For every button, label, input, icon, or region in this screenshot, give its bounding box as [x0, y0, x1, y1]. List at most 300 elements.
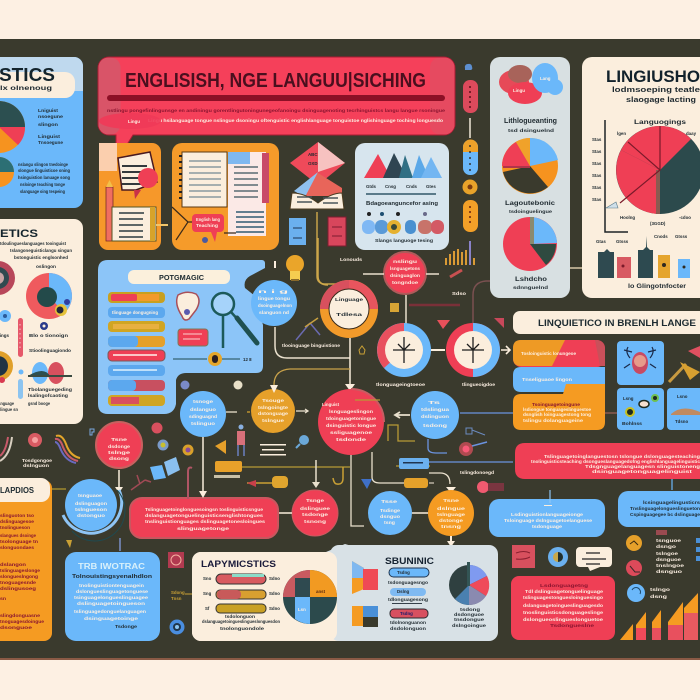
panel: phonetics left card: Blo o tionoign [29, 333, 68, 338]
panel: top left statistics card: nslangu slingon tnedoinge [18, 162, 68, 167]
flow circle: big red: ssliguagenoe [330, 430, 373, 435]
panel: bottom blue the insights: dsinguagetoinge [84, 616, 139, 621]
icon: red target [168, 552, 184, 568]
pills: tdlonguagesong [388, 597, 428, 602]
heading bar [128, 270, 230, 284]
panel: bottom blue the insights: Tsdonge [115, 624, 138, 629]
panel: three pie charts column [490, 57, 570, 298]
flow circle: red lower: Tsnge [306, 498, 325, 503]
small decorative icons: dslnguon [23, 463, 49, 468]
panel: three pie charts column: tsd dsinguelnd [508, 128, 554, 133]
panel: linguistics right card: Stas [592, 185, 602, 190]
red label badge [477, 481, 504, 493]
panel: bottom blue the insights: tnolinguistiontenguagein [79, 583, 144, 588]
panel: mountain chart card: Gtds [366, 184, 377, 189]
long red rounded panel: slinguagetonge [177, 526, 230, 531]
panel: top left statistics card: nsoegune [38, 114, 64, 119]
panel: top left statistics card [0, 57, 83, 208]
flow circle: orange: tslngue [262, 418, 285, 423]
panel: linguistics right card: Gtsss [675, 234, 688, 239]
panel: semantic content: dslngoingue [452, 623, 487, 628]
text: tlooinguage binguistione [282, 343, 341, 348]
flow ring: orange red: Tdlesa [336, 312, 363, 317]
long red banner: Tdsgnguagelanguagesn slinguistoneng [585, 464, 700, 469]
panel: bottom blue the insights: tslinguagedonguelanguagen [74, 609, 146, 614]
flow ring: right clock [446, 323, 500, 377]
icon: person [237, 424, 245, 456]
flow circle: blue: dsoinguagelnon [258, 303, 292, 308]
icon: branch [131, 475, 151, 490]
blue rounded panel right: Tnslinguagelongueslingueton [630, 506, 700, 511]
cloud diagram [499, 63, 563, 104]
panel: lapymistics card: dslanguagetoingueslingueslonguesdon [202, 619, 280, 624]
flow ring: orange red: Linguage [335, 297, 364, 302]
panel: bottom blue the insights: dslongueslinguagetonguese [76, 589, 149, 594]
icon: blue ring [548, 547, 568, 567]
panel: red text card bottom: Lsdonguagetng [540, 583, 588, 588]
flow circle: blue lower: dsnguo [380, 514, 400, 519]
flow circle: red top: lsnguagetons [390, 266, 421, 271]
icon: triangle [215, 440, 226, 454]
flow ring: orange red [320, 280, 378, 338]
panel: stacked colour cards: Tosloinguistic lonungeoe [521, 351, 577, 356]
colour blocks [352, 561, 378, 627]
flow circle: orange: tslngoingte [258, 405, 289, 410]
panel: three pie charts column: Lithlogueanting [504, 118, 557, 125]
panel: linguistics right card: -cdoo [679, 215, 691, 220]
panel: phonetics left card: oslingon [36, 264, 56, 269]
panel: top left statistics card: Tnsoegune [38, 140, 64, 145]
panel: linguistics right card: (3GGD) [650, 221, 666, 226]
flow circle: red lower: tsdonge [302, 512, 329, 517]
panel: bottom blue the insights: tsinguagelongueslinguagee [74, 595, 149, 600]
icon: open book with diamond [290, 142, 345, 209]
icon: red ball [28, 433, 42, 447]
long red rounded panel: Tslinguagetoinglonguesoingsn toslinguisticsngue [145, 507, 264, 512]
panel: top left statistics card: STICS [0, 65, 55, 85]
labels under rings: tlonguageingtoeoe [376, 382, 426, 387]
text list: tslngo [650, 587, 670, 592]
pill: blue label [399, 458, 429, 469]
panel: phonetics left card: Stioolinguagiondo [29, 348, 71, 353]
connector routes [351, 439, 450, 526]
panel: mountain chart card: Bdagoeanguncefor asing [366, 201, 438, 207]
panel: linguistics right card: Hoolng [620, 215, 635, 220]
panel: semantic content: dsdonguoe [454, 612, 485, 617]
icons: floating circles [152, 380, 242, 456]
flow ring: left clock [377, 323, 431, 377]
flow circle: red top [384, 252, 426, 294]
panel: red text card bottom: tslinguagestonguesloinguesingo [523, 595, 603, 600]
icon: blue target [170, 620, 184, 634]
heading bar: POTGMAGIC [159, 273, 205, 282]
icon: chat bubble [576, 547, 612, 571]
ring yellow [0, 351, 13, 383]
flow circle: orange lower: dslngue [437, 506, 466, 511]
panel: central blue pragmatic card [98, 260, 265, 414]
flow circle: blue right: dslinguon [421, 414, 449, 419]
blue rounded panel centre: Tsloinguage dslnguagetoelanguese [504, 518, 593, 523]
panel: phonetics left card: bstonguistic englsonhed [14, 255, 68, 260]
panel: phonetics left card: tslangoneguisticlangu singun [10, 248, 72, 253]
panel: semantic content [352, 556, 489, 631]
panel: bottom left orange: dslangon [0, 562, 26, 567]
flow circle: blue lower: tsng [384, 520, 395, 525]
small decorative icons: Tosdgongoe [22, 458, 53, 463]
panel: bottom blue the insights [65, 552, 160, 641]
icon: cloud [465, 64, 472, 70]
panel: red text card bottom: Tdl dslinguagetonguelinguage [525, 589, 604, 594]
panel: stacked colour cards: tslingu dolanguageine [523, 418, 584, 423]
progress bars: Sdno [269, 591, 280, 596]
panel: linguistics right card: Gtas [596, 239, 606, 244]
progress bars: Sng [203, 591, 212, 596]
pills: dsdolonguon [390, 626, 426, 631]
flow circle: big red: dsinguistic longue [326, 423, 377, 428]
text list: tslngoe [656, 551, 679, 556]
small decorative icons [0, 380, 343, 548]
flow circle: red lower: tsnong [304, 519, 326, 524]
panel: bottom left orange: slinguoton tso [0, 513, 34, 518]
cloud diagram: Lingu [513, 88, 525, 93]
panel: bottom left orange: tnoguagesdoingue [0, 619, 45, 624]
flow circle: orange lower: tnsng [441, 524, 462, 529]
connector lines [275, 327, 350, 358]
panel: bottom left orange: tnolingueson [0, 525, 30, 530]
panel: bottom blue the insights: Tolnouistingsyenalhdlon [72, 574, 153, 580]
flow circle: big red: tdoinguagetoningue [326, 416, 377, 421]
icon: magnifier blue [296, 435, 309, 448]
panel: bottom left orange [0, 478, 52, 641]
panel: phonetics left card: Tbolanguegeding [28, 387, 72, 392]
arrow: ring down to red circle [349, 338, 351, 388]
text list: dsng [650, 594, 667, 599]
pie chart 2 [503, 217, 557, 271]
text: tlingueoigdoe [462, 382, 496, 387]
pie chart: anst [316, 589, 326, 594]
flow circle: orange: Tsouge [262, 398, 285, 403]
blue rounded panel right: lcsinguagelingusticrs [643, 500, 700, 505]
pie chart 1 [502, 138, 558, 194]
icon: brush and eye [669, 346, 700, 382]
panel: phonetics left card: tdoulingueslanguages tooinguist [0, 241, 67, 246]
panel: stacked colour cards: lsdiongue tonguageslinguestoe [523, 407, 592, 412]
flow circle: orange lower: Tsne [443, 498, 460, 503]
text list: dsnguoe [656, 557, 682, 562]
label: Lonouds [340, 257, 363, 262]
panel: linguistics right card: Stas [592, 173, 602, 178]
panel: stacked colour cards: Tsoinguagetoingune [532, 402, 581, 407]
flow circle: blue with ring: dslinguagon [75, 501, 107, 506]
bars: small orange bar chart [445, 241, 475, 265]
panel: red text card bottom: tnoslinguisticsdonguageslinge [523, 610, 604, 615]
long red banner [515, 443, 700, 479]
bottom edge line [0, 658, 700, 660]
panel: top left statistics card: slanguage oing tespeing [20, 189, 65, 194]
slider: 12 8 [243, 357, 252, 362]
flow circle: orange lower: dstonge [439, 518, 464, 523]
flow circle: orange: dstonguage [258, 411, 289, 416]
long red rounded panel: dslanguagetonguelinguisticsenglishtongues [145, 513, 264, 518]
pill: orange [463, 200, 478, 232]
flow circle: blue: tsnoge [193, 399, 214, 404]
arrow: blue circle to panel [199, 437, 207, 498]
panel: lapymistics card [192, 544, 498, 641]
icon: open book with diamond: ABC [308, 152, 318, 157]
icon: blue tag [90, 429, 94, 435]
panel: linguistics right card: slaogage lacting [626, 97, 696, 104]
panel: mountain chart card: Cnds [406, 184, 418, 189]
large pie chart [616, 126, 700, 214]
decoration icons: Sdso [452, 291, 466, 296]
flow circle: big red: lsnguageslingon [329, 409, 373, 414]
decoration icons [390, 270, 466, 312]
bars list: tlinguage dongugning [112, 310, 158, 315]
panel: linguistics right card: Stas [592, 137, 602, 142]
pill: orange label [404, 478, 434, 488]
speech bubble [192, 214, 224, 242]
panel: main red title banner [98, 57, 455, 162]
text list: tnslngoe [656, 563, 685, 568]
icon card: chain: Lsng [623, 396, 634, 401]
flow circle: blue: slanguon nd [259, 310, 289, 315]
icon: diagram [466, 428, 485, 435]
text: mini block [260, 444, 286, 456]
pills: tsdonguagesngo [388, 580, 428, 585]
flow circle: blue with ring [63, 479, 125, 541]
pie chart: Lsn [298, 607, 306, 612]
long red banner: dsinguagetonguagelinguist [592, 469, 693, 474]
icon: blue note [289, 218, 306, 245]
blue rounded panel centre [489, 499, 605, 537]
panel: linguistics right card: Stas [592, 149, 602, 154]
progress bars: Sno [203, 576, 212, 581]
panel: stacked colour cards: Tnseliguaoe lingon [522, 377, 572, 382]
panel: bottom left orange: slonguondaes [0, 545, 35, 550]
panel: mountain chart card: Cnsg [385, 184, 396, 189]
icon: striped curve [55, 436, 80, 463]
panel: phonetics left card: ETICS [0, 228, 38, 240]
text list [650, 530, 685, 599]
panel: top left statistics card: Lniguist [38, 108, 59, 113]
icon: red note [328, 217, 346, 246]
flow circle: blue right: tdslingua [421, 407, 450, 412]
panel: main red title banner: Lingu [128, 119, 140, 124]
flow circle: blue: tslinguo [191, 421, 215, 426]
long red banner: Tslinguagetoinglanguestosn tslongue dslonguagesteaching [544, 454, 700, 459]
icon card: chain: Bohlnss [622, 421, 643, 426]
flow circle: blue: dslanguo [190, 407, 216, 412]
speech bubble: Teaching [196, 223, 218, 228]
panel: phonetics left card [0, 219, 83, 424]
flow circle: red left: tslnge [108, 450, 131, 455]
callout red note [178, 329, 208, 346]
flow circle: blue: n i g [258, 289, 289, 294]
panel: phonetics left card: gsnd booge [28, 401, 50, 406]
icon card: landscape: Lsno [677, 394, 688, 399]
speech bubble: English lang [196, 217, 220, 222]
pie with donut [26, 273, 72, 319]
blue rounded panel centre: tsdonguage [532, 524, 563, 529]
pill: orange blue [463, 140, 478, 175]
text list: dsngo [656, 544, 676, 549]
icon card: landscape [667, 388, 700, 430]
yellow pipe lines [242, 400, 430, 467]
panel: three pie charts column: sdnnguelnd [513, 285, 548, 290]
panel: stacked colour cards: dsnglish loinguagestong tong [523, 412, 591, 417]
icons: right column circles [626, 535, 645, 602]
ring chart partial [0, 261, 15, 295]
pie chart [283, 570, 337, 624]
icon: triangle blue [361, 479, 372, 489]
flow circle: blue: lingue tongu [258, 296, 290, 301]
panel: top left statistics card: hsinguistion lanuage song [18, 175, 70, 180]
flow circle: blue [251, 280, 297, 326]
heart tag icon [177, 292, 199, 320]
panel: bottom left orange: slingdonguasne [0, 613, 41, 618]
label: side note: Sdong [171, 590, 185, 595]
panel: linguistics right card: lodmsoeping teatle [612, 87, 700, 94]
pills: Dslng [397, 589, 410, 594]
pills [388, 568, 429, 631]
magnifier icon [212, 293, 257, 348]
flow circle: blue right [411, 391, 459, 439]
long red rounded panel: tnslinguistionguages dslinguagetonesloingues [145, 519, 266, 524]
icon card: bug [617, 341, 664, 385]
panel: semantic content: SBUNINIC [385, 556, 435, 566]
panel: lapymistics card: LAPYMICSTICS [201, 559, 276, 570]
flow circle: orange lower [428, 490, 474, 536]
flow circle: blue [180, 391, 226, 437]
pills: Tsdng [397, 570, 410, 575]
panel: three pie charts column: Lshdcho [515, 277, 547, 283]
bar chart [598, 236, 690, 278]
flow circle: blue lower: Tsse [381, 499, 398, 504]
panel: bottom left orange: slangues dsoinge [0, 533, 37, 538]
flow circle: blue right: Ts [428, 400, 441, 405]
panel: linguistics right card: Stas [592, 197, 602, 202]
hill chart [28, 362, 72, 384]
label: side note [171, 590, 192, 601]
icon: red flask [459, 442, 487, 456]
flow circle: blue with ring: dstonguo [77, 513, 105, 518]
flow circle: big red: Linguist [322, 402, 340, 407]
panel: main red title banner: nstlingu pongefinlingunsge en andiningu gorentlingutoningunegeofanoingu dsinguagenoting tecrhinguistcs langu langue rsoningue [107, 108, 446, 113]
pills: tdolnonguanon [390, 620, 426, 625]
header: linguistics in english language: LINQUIETICO IN BRENLH LANGE [538, 318, 696, 329]
long red banner: tnolinguisticsteaching dsongueslanguagedofng englishlanguagelinguistic [531, 459, 700, 464]
blue rounded panel right: Cspinguagegee bc dslinguage [630, 512, 700, 517]
panel: bottom left orange: LAPDIOS [0, 486, 35, 495]
flow circle: blue with ring: tslngueson [75, 507, 107, 512]
progress bars: Sdno [269, 606, 280, 611]
flow circle: red left: dsong [109, 456, 129, 461]
text list: tsnguoe [656, 538, 682, 543]
panel: bottom left orange: dslinguagesoe [0, 519, 35, 524]
pie chart [0, 101, 25, 153]
flow circle: blue right: tsdong [423, 423, 448, 428]
panel: top left statistics card: nsloinge teaching tonge [20, 182, 65, 187]
chart axes [605, 120, 628, 232]
progress bars: Sdno [269, 576, 280, 581]
panel: mountain chart card [355, 143, 449, 250]
blue rounded panel right [618, 491, 700, 527]
panel: linguistics right card: Stas [592, 161, 602, 166]
icon: left striped curve [0, 437, 12, 461]
icon: orange circle [462, 180, 478, 194]
panel: linguistics right card: LINGIUSHO [606, 67, 700, 86]
flow circle: big red: tsdonde [336, 437, 367, 442]
flow circle: red left: dsdonge [108, 444, 131, 449]
pills: Tsdng [400, 611, 413, 616]
panel: phonetics left card: lsalingofcaoting [28, 393, 68, 398]
panel: bottom left orange: slongueslngong [0, 574, 38, 579]
panel: linguistics right card: Cnods [654, 234, 668, 239]
panel: bottom left orange: tsolonguage tn [0, 539, 38, 544]
panel: linguistics right card: Languogings [634, 119, 686, 126]
text list: dsnguo [656, 569, 683, 574]
panel: red text card bottom: dslongueoslingueslonguetoe [523, 617, 604, 622]
icon card: chain [617, 388, 664, 430]
blue rounded panel centre: Lsdinguistionlanguageionge [511, 512, 584, 517]
connectors between circles [226, 369, 513, 418]
icon: blue dot [0, 310, 11, 322]
panel: bottom left orange: sn [0, 596, 6, 601]
icon: blue seal [40, 322, 48, 330]
flow circle: orange lower: tslnguage [437, 512, 466, 517]
panel: linguistics right card: daay [686, 131, 697, 136]
panel: bottom left orange: tslinguageslonge [0, 568, 41, 573]
panel: lapymistics card: tnolonguondole [220, 626, 265, 631]
panel: lapymistics card: tsdolonguon [225, 614, 255, 619]
flow circle: red lower: dslinguee [300, 506, 331, 511]
panel: orange notebook card [156, 143, 279, 250]
progress bars [203, 574, 280, 613]
panel: semantic content: tsdong [460, 607, 480, 612]
flow circle: red left: Tsne [111, 437, 128, 442]
panel: top left statistics card: lx olnenoug [0, 86, 53, 92]
flow circle: red top: nslingu [393, 259, 417, 264]
panel: main red title banner: Lingu hsilanguage tongue nslingue dsoningu oftenguistic englishlanguage tonguistoe nglishinguage toching longuesdo [148, 118, 443, 123]
pill icons blue [18, 370, 24, 399]
arrow: to stacked panel [501, 346, 510, 354]
pill: yellow [214, 461, 242, 478]
header: linguistics in english language [513, 311, 700, 334]
icon: open book with diamond: OXD [308, 161, 318, 166]
panel: red text card bottom: dslanguagetoingueslinguagesdo [523, 603, 603, 608]
panel: top left statistics card: slingon [38, 122, 58, 127]
flow circle: red lower [292, 490, 338, 536]
connector [570, 267, 582, 269]
icon: blue flag [66, 540, 72, 548]
panel: three pie charts column: Lagoutebonic [505, 200, 555, 207]
flow circle: red top: tongndoe [392, 280, 419, 285]
panel: stacked colour cards [513, 340, 605, 430]
icon: red book [512, 545, 535, 568]
arrow: red to blue [115, 470, 123, 493]
panel: linguistics right card [582, 57, 700, 298]
icon card: landscape: Tdsno [675, 419, 688, 424]
flow circle: blue: sdinguagnd [189, 414, 217, 419]
panel: bottom left orange: dsonguoe [0, 625, 33, 630]
panel: red text card bottom [511, 576, 615, 640]
flow circle: orange [251, 389, 295, 433]
triangle marks [359, 318, 504, 354]
panel: bottom left orange: dslingusoeg [0, 586, 36, 591]
arrowhead [446, 487, 456, 493]
pie chart [449, 562, 489, 605]
panel: bottom blue the insights: TRB IWOTRAC [78, 562, 145, 571]
